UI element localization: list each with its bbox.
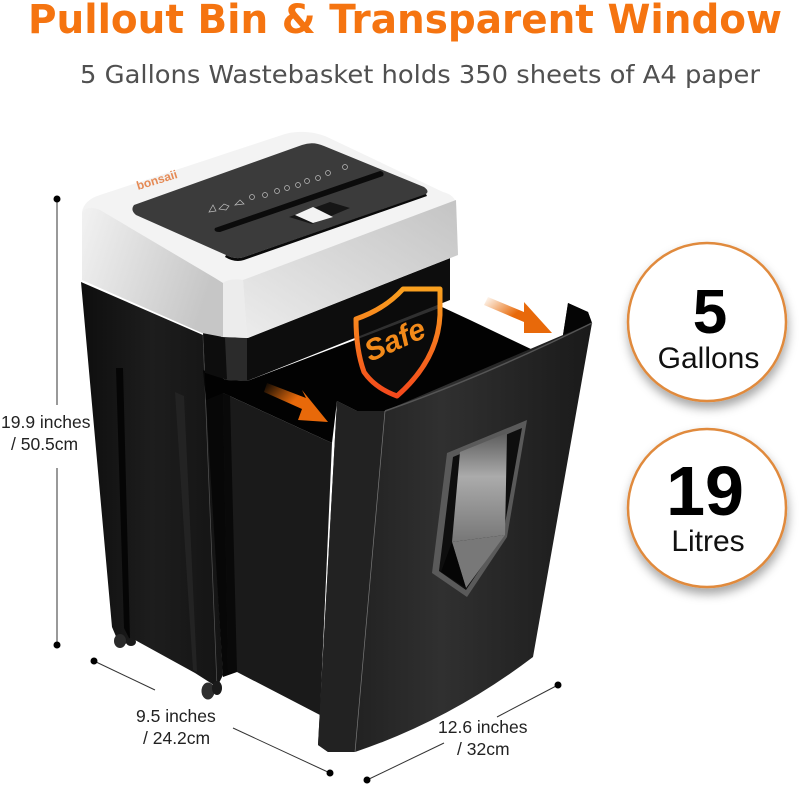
gap behind drawer bbox=[203, 370, 237, 677]
mode switch bbox=[289, 202, 350, 224]
panel icons bbox=[209, 164, 348, 212]
arrow: into drawer left bbox=[264, 383, 328, 422]
height dimension: 19.9 inches bbox=[1, 412, 91, 432]
paper slot bbox=[215, 171, 384, 232]
band under head bbox=[203, 258, 450, 381]
depth dimension: 9.5 inches bbox=[136, 706, 216, 726]
brand logo: bonsaii bbox=[135, 167, 179, 193]
drawer interior bbox=[205, 307, 533, 443]
depth dimension: / 24.2cm bbox=[143, 728, 210, 748]
width dimension bbox=[364, 682, 562, 784]
badge: 19 litres: Litres bbox=[671, 525, 745, 558]
safe shield bbox=[356, 289, 440, 396]
height dimension bbox=[1, 196, 91, 648]
control panel bbox=[132, 143, 428, 258]
badge: 19 litres: 19 bbox=[666, 452, 744, 530]
height dimension: / 50.5cm bbox=[11, 434, 78, 454]
cabinet body bbox=[81, 258, 450, 687]
badge: 5 gallons bbox=[628, 243, 786, 401]
badge: 19 litres bbox=[628, 429, 786, 587]
width dimension: 12.6 inches bbox=[438, 717, 528, 737]
drawer side bbox=[223, 393, 332, 715]
shredder head bbox=[82, 132, 458, 338]
shredder product illustration bbox=[81, 132, 592, 752]
arrow: into drawer right bbox=[484, 297, 552, 333]
subtitle: 5 Gallons Wastebasket holds 350 sheets of A4 paper bbox=[80, 60, 761, 89]
width dimension: / 32cm bbox=[457, 739, 510, 759]
safe shield: Safe bbox=[359, 312, 431, 368]
pull-out door bbox=[318, 303, 592, 752]
transparent window bbox=[432, 420, 527, 597]
badge: 5 gallons: 5 bbox=[693, 278, 727, 347]
caster bbox=[202, 681, 222, 700]
badge: 5 gallons: Gallons bbox=[658, 342, 759, 375]
depth dimension bbox=[90, 658, 334, 776]
